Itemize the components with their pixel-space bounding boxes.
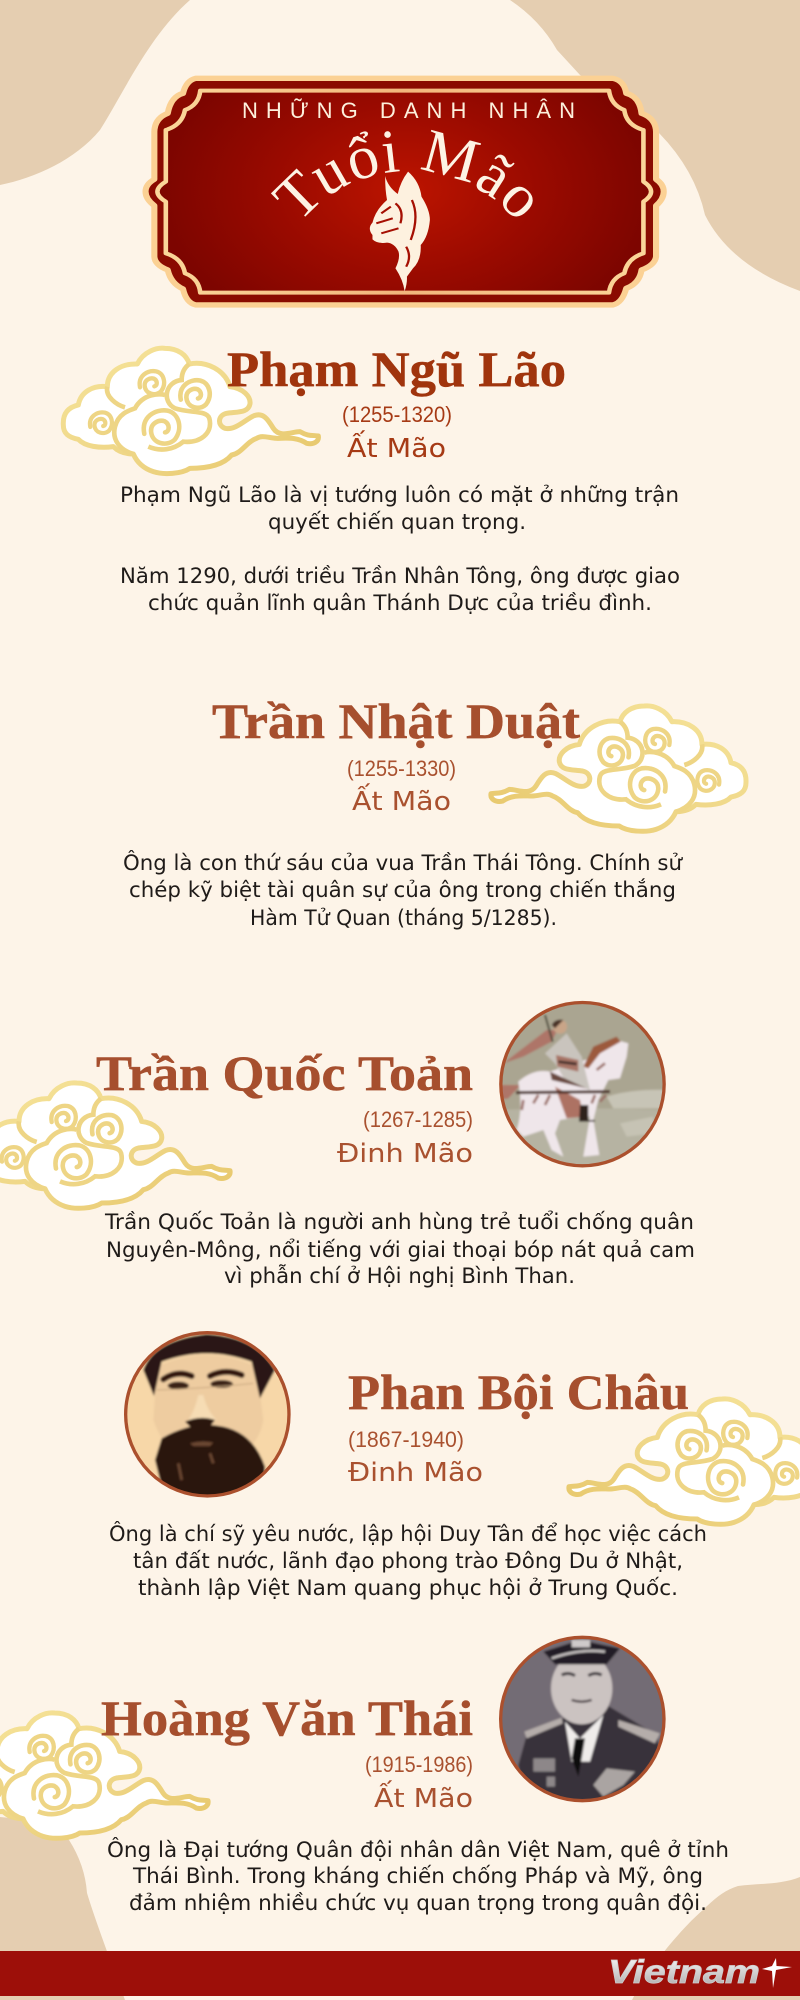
cloud 1 bbox=[63, 348, 318, 474]
body text: Hàm Tử Quan (tháng 5/1285). bbox=[250, 906, 557, 930]
body text: vì phẫn chí ở Hội nghị Bình Than. bbox=[224, 1263, 575, 1288]
badge title on arc: Tuổi Mão bbox=[271, 130, 533, 217]
body text bbox=[123, 850, 684, 930]
years: (1255-1320) bbox=[342, 402, 452, 427]
cloud 2 bbox=[491, 706, 746, 831]
body text: Ông là chí sỹ yêu nước, lập hội Duy Tân để học việc cách bbox=[109, 1521, 707, 1546]
name: Hoàng Văn Thái bbox=[101, 1690, 473, 1746]
body text: chức quản lĩnh quân Thánh Dực của triều đình. bbox=[148, 591, 652, 615]
body text: Ông là Đại tướng Quân đội nhân dân Việt Nam, quê ở tỉnh bbox=[107, 1837, 729, 1862]
zodiac year: Đinh Mão bbox=[348, 1458, 483, 1488]
zodiac year: Đinh Mão bbox=[337, 1139, 473, 1169]
cloud 5 bbox=[0, 1713, 208, 1838]
panel: Trần Quốc Toản bbox=[96, 997, 695, 1288]
years: (1867-1940) bbox=[348, 1427, 464, 1452]
body text bbox=[109, 1521, 707, 1600]
zodiac year: Ất Mão bbox=[352, 782, 451, 817]
cloud 4 bbox=[569, 1399, 800, 1524]
body text: Nguyên-Mông, nổi tiếng với giai thoại bóp nát quả cam bbox=[106, 1238, 695, 1262]
body text: chép kỹ biệt tài quân sự của ông trong chiến thắng bbox=[129, 878, 676, 902]
body text: đảm nhiệm nhiều chức vụ quan trọng trong quân đội. bbox=[129, 1891, 707, 1915]
portrait: man with beard and glasses bbox=[124, 1331, 291, 1498]
badge frame bbox=[146, 78, 664, 305]
name: Phạm Ngũ Lão bbox=[227, 341, 566, 397]
body text: Năm 1290, dưới triều Trần Nhân Tông, ông được giao bbox=[120, 564, 680, 588]
panel: Phạm Ngũ Lão bbox=[120, 341, 680, 615]
portrait: general in uniform bbox=[499, 1636, 666, 1802]
badge subtitle: NHỮNG DANH NHÂN bbox=[242, 98, 575, 123]
body text: Trần Quốc Toản là người anh hùng trẻ tuổi chống quân bbox=[104, 1210, 694, 1234]
years: (1255-1330) bbox=[347, 756, 456, 781]
name: Trần Nhật Duật bbox=[212, 693, 580, 749]
body text: Phạm Ngũ Lão là vị tướng luôn có mặt ở những trận bbox=[120, 483, 679, 507]
body text: tân đất nước, lãnh đạo phong trào Đông Du ở Nhật, bbox=[133, 1549, 683, 1573]
title badge bbox=[142, 76, 667, 308]
zodiac year: Ất Mão bbox=[374, 1779, 473, 1814]
panel: Trần Nhật Duật bbox=[123, 693, 684, 930]
icon: cat head bbox=[370, 172, 430, 291]
background blob: bottom right bbox=[632, 1877, 800, 2000]
body text bbox=[104, 1210, 695, 1288]
portrait: rider on white horse bbox=[499, 1000, 666, 1168]
years: (1915-1986) bbox=[365, 1752, 473, 1777]
background blob: top left bbox=[0, 0, 190, 185]
body text: Thái Bình. Trong kháng chiến chống Pháp và Mỹ, ông bbox=[132, 1864, 703, 1888]
name: Phan Bội Châu bbox=[348, 1364, 689, 1420]
body text: quyết chiến quan trọng. bbox=[268, 510, 526, 534]
years: (1267-1285) bbox=[363, 1107, 473, 1132]
body text: thành lập Việt Nam quang phục hội ở Trung Quốc. bbox=[138, 1576, 678, 1600]
name: Trần Quốc Toản bbox=[96, 1045, 473, 1101]
logo: Vietnam+: Vietnam bbox=[608, 1953, 760, 1990]
panel: Hoàng Văn Thái bbox=[101, 1632, 729, 1915]
panel: Phan Bội Châu bbox=[109, 1327, 707, 1600]
cloud 3 bbox=[0, 1083, 230, 1208]
body text bbox=[120, 483, 680, 615]
zodiac year: Ất Mão bbox=[347, 429, 446, 464]
body text: Ông là con thứ sáu của vua Trần Thái Tông. Chính sử bbox=[123, 850, 684, 875]
footer bar bbox=[0, 1951, 800, 1996]
background blob: top right bbox=[510, 0, 800, 291]
background blob: bottom left bbox=[0, 1817, 125, 2000]
body text bbox=[107, 1837, 729, 1915]
logo: Vietnam+ bbox=[608, 1953, 792, 1990]
